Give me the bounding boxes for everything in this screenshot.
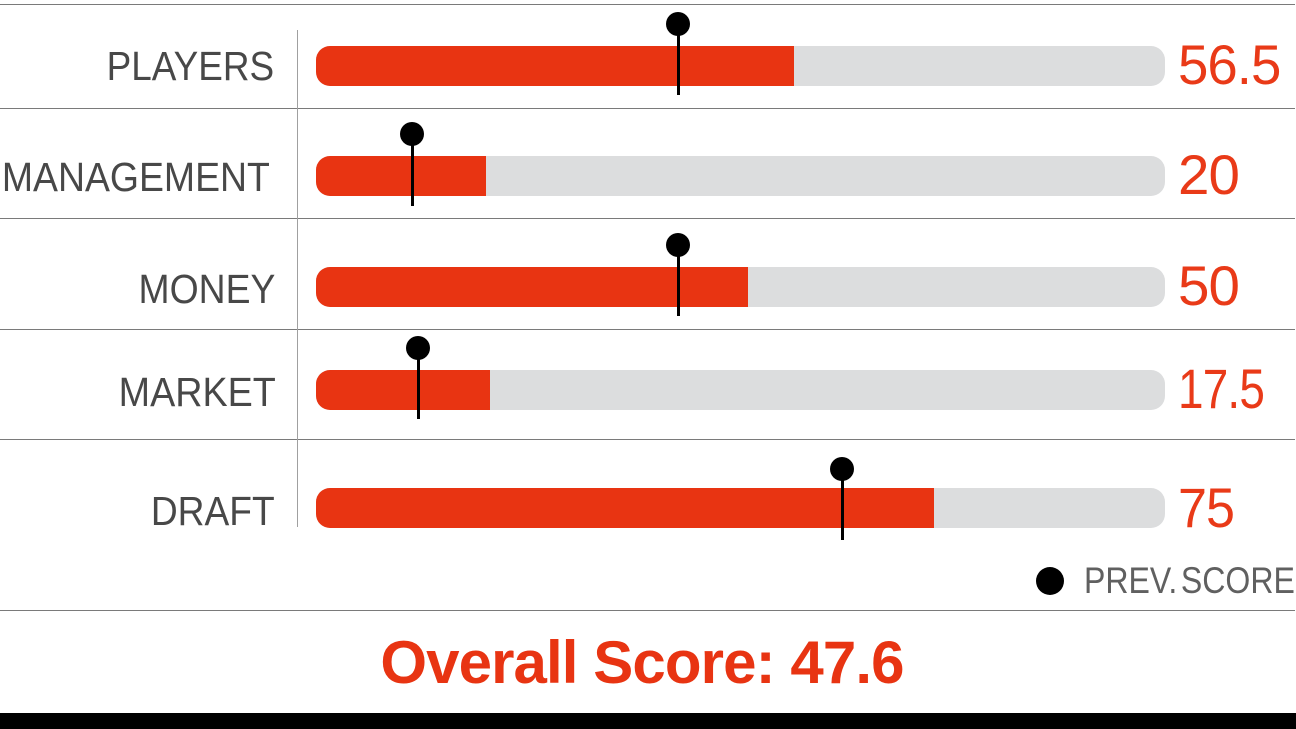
marker: draft previous score bbox=[830, 457, 854, 540]
label: players: PLAYERS bbox=[107, 43, 274, 89]
label: management: MANAGEMENT bbox=[2, 154, 270, 200]
bar: management 20 bbox=[316, 156, 1165, 196]
row: money bbox=[138, 233, 1239, 317]
label: money: MONEY bbox=[138, 266, 275, 312]
value: market: 17.5 bbox=[1178, 357, 1264, 420]
row: players bbox=[107, 12, 1280, 96]
label: draft: DRAFT bbox=[151, 488, 275, 534]
value: management: 20 bbox=[1178, 143, 1239, 206]
overall score: Overall Score: 47.6 bbox=[380, 629, 904, 696]
marker: players previous score bbox=[666, 12, 690, 95]
bottom black band bbox=[0, 713, 1296, 729]
marker: market previous score bbox=[406, 336, 430, 419]
label: market: MARKET bbox=[119, 369, 276, 415]
value: draft: 75 bbox=[1178, 476, 1234, 539]
bar: market 17.5 bbox=[316, 370, 1165, 410]
value: money: 50 bbox=[1178, 254, 1239, 317]
legend: previous score bbox=[1036, 560, 1295, 601]
row: market bbox=[119, 336, 1264, 420]
bar: players 56.5 bbox=[316, 46, 1165, 86]
marker: money previous score bbox=[666, 233, 690, 316]
legend label: PREV. SCORE bbox=[1084, 560, 1295, 601]
bar: draft 75 bbox=[316, 488, 1165, 528]
marker: management previous score bbox=[400, 122, 424, 206]
row: management bbox=[2, 122, 1239, 206]
bar: money 50 bbox=[316, 267, 1165, 307]
legend dot bbox=[1036, 567, 1064, 595]
row: draft bbox=[151, 457, 1234, 540]
value: players: 56.5 bbox=[1178, 33, 1280, 96]
